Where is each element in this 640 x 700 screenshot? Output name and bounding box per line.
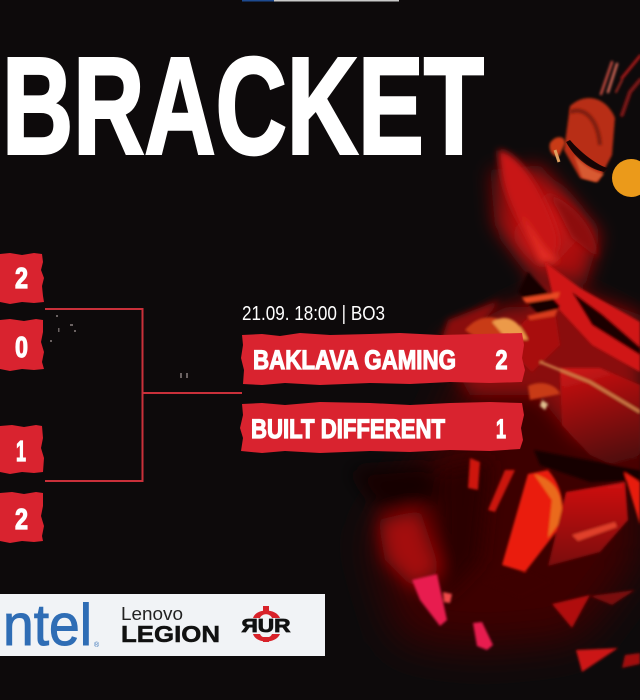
score row 3: 1: [16, 436, 26, 468]
match info: 21.09. 18:00 | BO3: [242, 303, 385, 325]
hair streaks: [440, 150, 598, 345]
hair and body dark red masses: [350, 165, 640, 600]
score row 4: 2: [15, 504, 28, 536]
score row 1: [0, 253, 44, 304]
logo: RUR: ЯUR: [242, 616, 290, 636]
score row 2: 0: [15, 332, 28, 364]
final match: Built Different: BUILT DIFFERENT: [251, 414, 445, 444]
character glow: [370, 300, 640, 650]
illustration: red masked character: [350, 56, 640, 672]
logo: Lenovo Legion: Lenovo: [121, 604, 183, 624]
logo: Lenovo Legion: [121, 604, 220, 647]
logo: Lenovo Legion: LEGION: [121, 621, 220, 647]
logo: intel: ntel: [3, 593, 92, 658]
orange goggle lens: [612, 159, 640, 197]
head mask: [550, 98, 615, 182]
final match: Baklava Gaming: [241, 333, 525, 385]
bracket connector lines: [45, 309, 242, 481]
final match: Baklava Gaming: BAKLAVA GAMING: [253, 345, 456, 375]
logo: intel: ®: [94, 641, 100, 649]
shoulder slashes: [412, 262, 640, 672]
final match: Built Different: 1: [496, 414, 506, 444]
score row 2: [0, 319, 44, 371]
upper hair strands: [601, 56, 640, 115]
team scores: left round column: [0, 253, 44, 543]
logo: RUR: [242, 606, 290, 642]
final match: Baklava Gaming: 2: [496, 345, 508, 375]
final match: Built Different: [240, 402, 524, 453]
score row 4: [0, 492, 44, 543]
score row 1: 2: [15, 263, 28, 295]
specks of texture: [50, 315, 188, 378]
sponsor bar: [0, 593, 325, 658]
top edge sliver of cropped logo: [242, 0, 399, 2]
score row 3: [0, 425, 44, 474]
